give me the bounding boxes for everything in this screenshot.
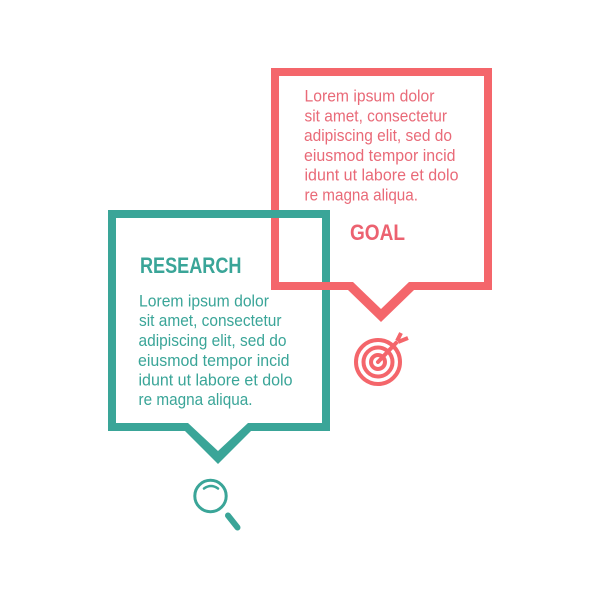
panel: goal speech bubble [271,68,492,322]
text block: goal body: re magna aliqua. [304,186,418,204]
text block: research body: adipiscing elit, sed do [138,332,286,350]
heading: research: RESEARCH [140,253,242,278]
icon: target with arrow [356,333,408,384]
text block: goal body: idunt ut labore et dolo [304,166,458,184]
text block: research body: sit amet, consectetur [139,312,282,330]
text block: research body [138,292,292,409]
text block: research body: idunt ut labore et dolo [138,372,292,390]
icon: magnifying glass [195,480,238,528]
text block: research body: Lorem ipsum dolor [139,292,269,310]
goal bubble strand passing over research bubble [320,282,332,290]
text block: research body: re magna aliqua. [138,391,252,409]
text block: goal body: sit amet, consectetur [304,108,447,126]
heading: goal: GOAL [350,220,405,245]
text block: goal body: adipiscing elit, sed do [304,127,452,145]
text block: goal body: Lorem ipsum dolor [304,88,435,106]
text block: research body: eiusmod tempor incid [138,352,290,370]
text block: goal body: eiusmod tempor incid [304,147,456,165]
text block: goal body [304,88,458,204]
panel: research speech bubble [108,210,330,464]
